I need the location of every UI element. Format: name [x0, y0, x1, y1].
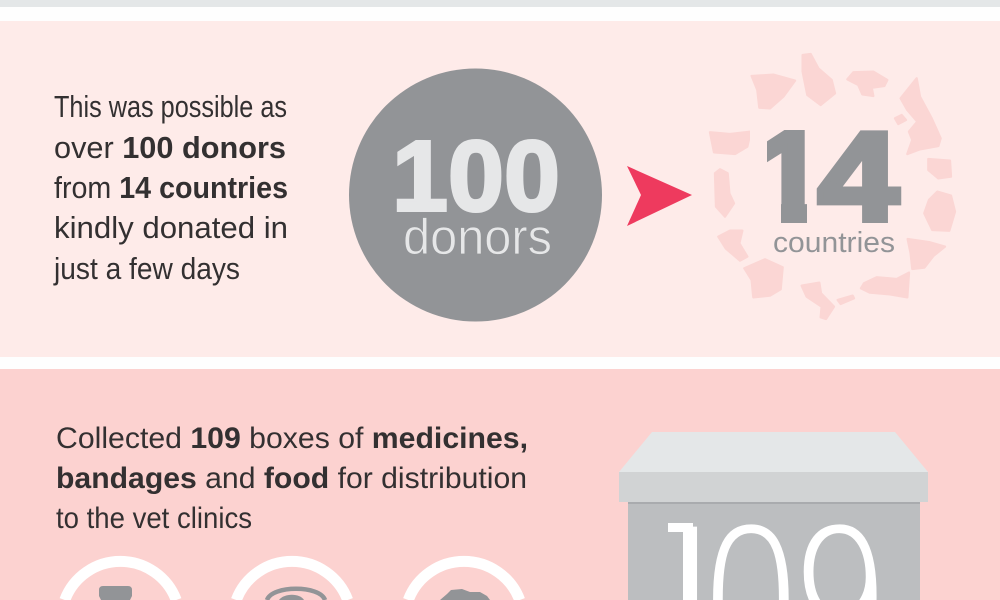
text block: boxes description: Collected 109 boxes of medicines, — [56, 422, 528, 455]
text block: boxes description: to the vet clinics — [56, 502, 252, 535]
country map ring — [710, 54, 955, 319]
icon: food — [408, 561, 520, 600]
icon: medicine bottle — [65, 561, 176, 600]
box illustration — [619, 432, 928, 600]
text block: boxes description — [56, 422, 528, 535]
text block: boxes description: bandages and food for distribution — [56, 462, 527, 495]
text block: donors description — [53, 89, 288, 286]
icon: bandage roll — [236, 561, 348, 600]
text block: donors description: This was possible as — [54, 89, 287, 124]
donors circle: 100 — [392, 120, 560, 232]
large number 14 — [750, 106, 899, 247]
text block: donors description: from 14 countries — [54, 170, 288, 205]
panel: boxes — [0, 369, 1000, 600]
large number 14: 1 — [755, 106, 825, 247]
top band — [0, 0, 1000, 7]
arrow — [627, 166, 692, 226]
text block: donors description: just a few days — [53, 251, 240, 286]
text block: donors description: over 100 donors — [54, 130, 286, 165]
countries label: countries — [773, 227, 895, 259]
large number 14: 4 — [818, 106, 899, 247]
panel: donors — [0, 21, 1000, 357]
donors circle: donors — [403, 209, 552, 265]
donors circle — [349, 68, 602, 322]
text block: donors description: kindly donated in — [54, 210, 288, 245]
